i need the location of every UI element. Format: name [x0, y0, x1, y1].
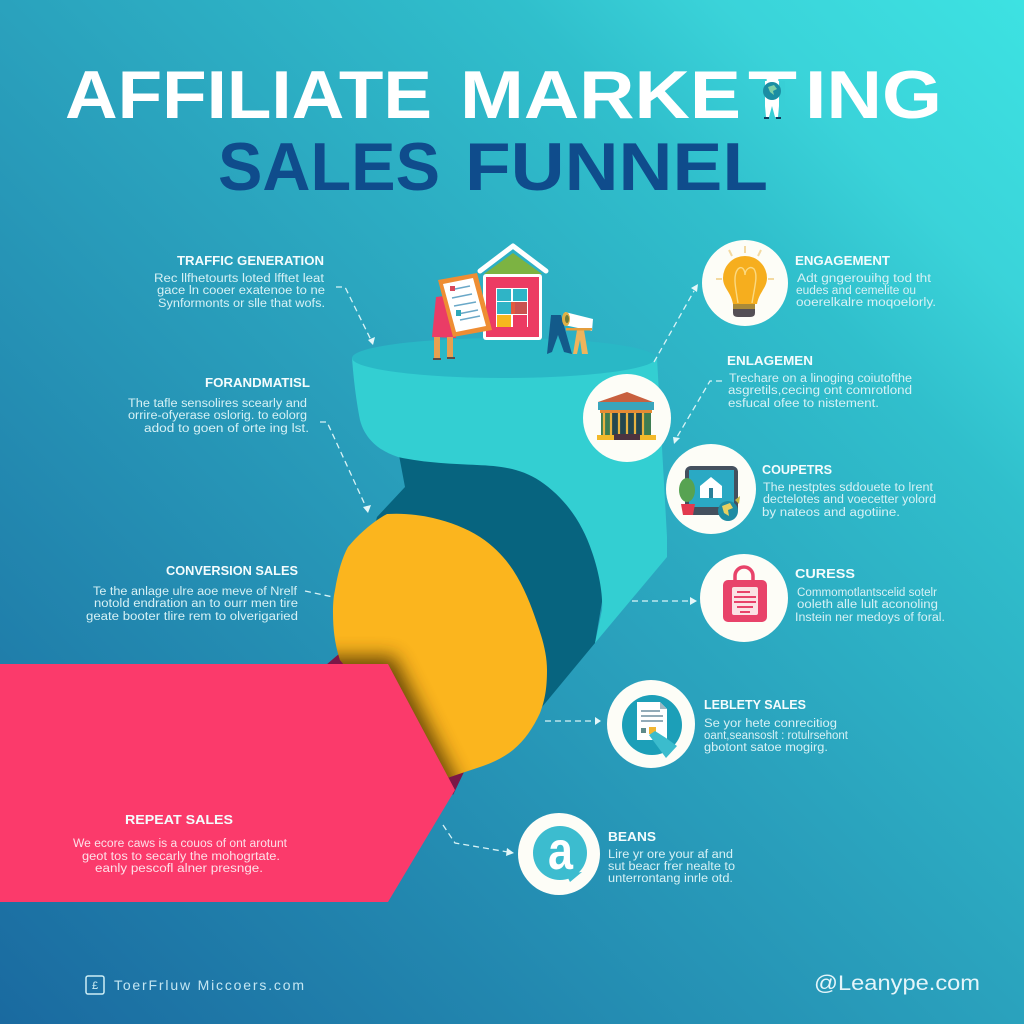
dashed arrow: brand	[443, 825, 514, 856]
funnel: maroon lower section	[326, 653, 464, 795]
panel: second engagement	[583, 353, 912, 462]
body text: dectelotes and voecetter yolord	[763, 494, 936, 506]
body text: geot tos to secarly the mohogrtate.	[82, 851, 280, 863]
body text	[128, 398, 309, 435]
dashed arrow: second engagement	[673, 381, 722, 444]
body text: Rec llfhetourts loted lfftet leat	[154, 273, 325, 285]
funnel: shadow cast on yellow section	[336, 642, 468, 778]
dashed arrow: form	[320, 422, 371, 513]
panel: couplers	[666, 444, 936, 534]
funnel: yellow section	[333, 514, 547, 778]
body text: gace ln cooer exatenoe to ne	[157, 285, 325, 297]
heading: COUPETRS	[762, 462, 832, 477]
heading: ENGAGEMENT	[795, 253, 890, 268]
body text: Se yor hete conrecitiog	[704, 718, 837, 730]
icon: person holding certificate	[432, 273, 492, 360]
body text: eudes and cemelite ou	[796, 285, 916, 297]
panel: traffic generation	[154, 253, 325, 310]
title: SALES	[218, 129, 440, 205]
body text: The nestptes sddouete to lrent	[763, 482, 934, 494]
panel: purchases	[700, 554, 945, 642]
title: AFFILIATE	[65, 57, 432, 133]
body text: oant,seansoslt : rotulrsehont	[704, 730, 849, 742]
panel: form and list	[128, 375, 310, 435]
body text: Synformonts or slle that wofs.	[158, 298, 325, 310]
icon: footer logo: £	[92, 980, 98, 992]
body text: sut beacr frer nealte to	[608, 861, 735, 873]
icon: house	[480, 246, 546, 340]
body text	[704, 718, 849, 754]
panel: engagement	[702, 240, 936, 326]
body text: geate booter tlire rem to olverigaried	[86, 611, 298, 623]
body text	[86, 586, 298, 623]
heading: BEANS	[608, 829, 656, 844]
body text: Adt gngerouihg tod tht	[797, 273, 932, 285]
panel: repeat sales	[73, 812, 288, 875]
body text: Lire yr ore your af and	[608, 849, 733, 861]
heading: CURESS	[795, 566, 855, 581]
body text	[73, 838, 288, 875]
body text: Te the anlage ulre aoe meve of Nrelf	[93, 586, 298, 598]
body text	[154, 273, 325, 310]
funnel: dark middle section	[345, 450, 604, 790]
body text: ooleth alle lult aconoling	[797, 599, 938, 611]
body text: ooerelkalre moqoelorly.	[796, 297, 936, 309]
dashed arrow: engagement	[654, 284, 698, 362]
body text: notold endration an to ourr men tire	[94, 598, 298, 610]
footer: left logo and site name	[86, 976, 304, 994]
body text: gbotont satoe mogirg.	[704, 742, 828, 754]
body text	[795, 587, 945, 624]
icon: bank building	[583, 374, 671, 462]
title: T	[748, 57, 797, 133]
body text	[608, 849, 735, 885]
dashed arrow: traffic generation	[336, 287, 375, 345]
title: ING	[805, 57, 942, 133]
footer: right site name: @Leanype.com	[814, 972, 980, 995]
heading: CONVERSION SALES	[166, 563, 298, 578]
icon: light bulb	[702, 240, 788, 326]
icon: letter a badge: a	[548, 821, 574, 881]
body text: by nateos and agotiine.	[762, 507, 900, 519]
body text: Commomotlantscelid sotelr	[797, 587, 937, 599]
body text: esfucal ofee to nistement.	[728, 398, 879, 410]
body text: We ecore caws is a couos of ont arotunt	[73, 838, 288, 850]
body text: Trechare on a linoging coiutofthe	[729, 373, 912, 385]
icon: shopping bag	[700, 554, 788, 642]
dashed arrow: loyalty	[545, 717, 601, 725]
icon: tablet with plant and globe	[666, 444, 756, 534]
heading: ENLAGEMEN	[727, 353, 813, 368]
body text: unterrontang inrle otd.	[608, 873, 733, 885]
body text	[728, 373, 912, 410]
heading: LEBLETY SALES	[704, 697, 806, 712]
panel: brands	[518, 813, 735, 895]
heading: REPEAT SALES	[125, 812, 233, 827]
body text: Instein ner medoys of foral.	[795, 612, 945, 624]
icon: telescope on tripod	[547, 312, 593, 354]
panel: loyalty sales	[607, 680, 849, 768]
body text	[762, 482, 936, 519]
body text: adod to goen of orte ing lst.	[144, 423, 309, 435]
icon: figure holding globe on title letter T	[760, 81, 785, 120]
body text: eanly pescofl alner presnge.	[95, 863, 263, 875]
icon: footer logo	[86, 976, 104, 994]
footer text: ToerFrluw Miccoers.com	[114, 977, 304, 993]
title: MARKE	[460, 57, 741, 133]
heading: FORANDMATISL	[205, 375, 310, 390]
funnel: top rim	[352, 338, 656, 378]
funnel: teal upper body	[352, 358, 667, 643]
funnel	[0, 338, 667, 902]
dashed arrow: conversion	[305, 591, 333, 597]
heading: TRAFFIC GENERATION	[177, 253, 324, 268]
body text: orrire-ofyerase oslorig. to eolorg	[128, 410, 307, 422]
body text: The tafle sensolires scearly and	[128, 398, 307, 410]
illustration: house, certificate, person and telescope	[432, 246, 593, 360]
body text	[796, 273, 936, 309]
title: FUNNEL	[465, 129, 768, 205]
body text: asgretils,cecing ont comrotlond	[728, 385, 912, 397]
funnel: pink repeat sales block	[0, 664, 455, 902]
icon: document with hand	[607, 680, 695, 768]
title	[65, 57, 942, 205]
icon: letter a badge	[518, 813, 600, 895]
panel: conversion sales	[86, 563, 298, 623]
dashed arrow: purchase	[632, 597, 697, 605]
